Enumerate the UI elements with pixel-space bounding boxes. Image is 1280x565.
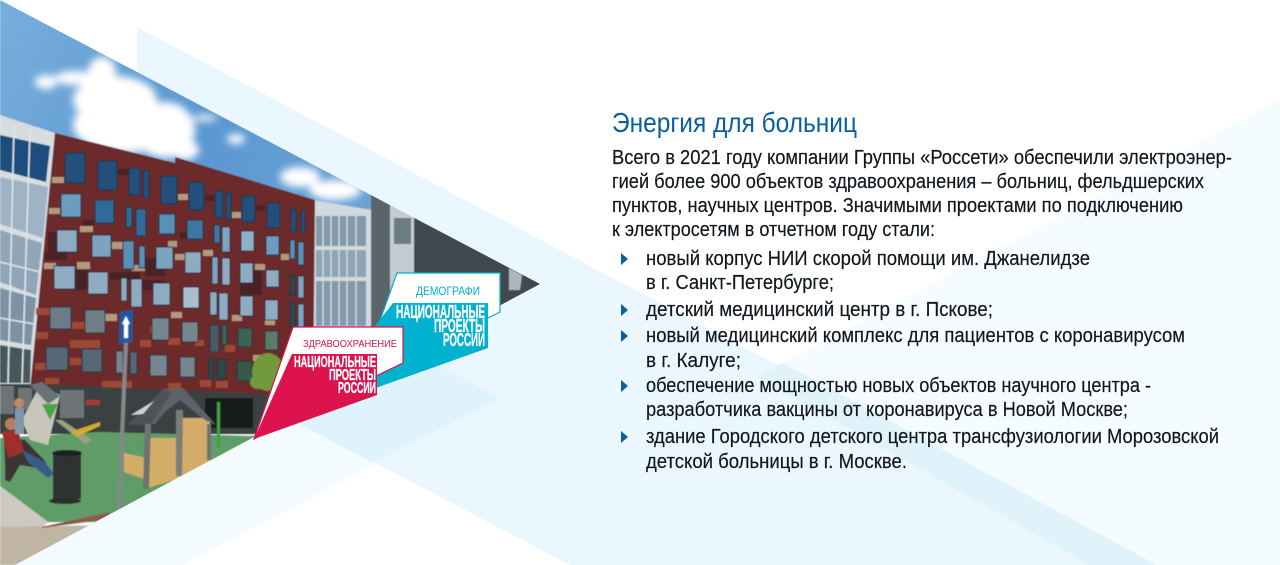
bullet: vaccine developer: разработчика вакцины от коронавируса в Новой Москве;: [646, 398, 1128, 421]
slide and climbing frame: [22, 382, 100, 445]
brick facade: [30, 133, 315, 400]
heading: Энергия для больниц: [612, 107, 857, 138]
logo wordmark: national projects russia: РОССИИ: [338, 380, 376, 397]
sky with clouds: [0, 0, 420, 240]
logo wordmark: national projects russia: РОССИИ: [443, 330, 485, 350]
logo wordmark: national projects russia: [396, 302, 485, 350]
logo wordmark: national projects russia: [294, 354, 376, 397]
label: healthcare: ЗДРАВООХРАНЕНИЕ: [303, 338, 397, 350]
tree: [250, 353, 284, 391]
bullet: transfusiology centre: детской больницы в г. Москве.: [646, 450, 907, 473]
building windows: [46, 153, 305, 381]
logo: healthcare national project: [254, 327, 403, 439]
intro paragraph: [612, 146, 1232, 241]
green playground ground: [0, 431, 255, 523]
left glass building: [0, 115, 55, 390]
logo wordmark: national projects russia: ПРОЕКТЫ: [434, 316, 485, 336]
bullet: research institute: новый корпус НИИ скорой помощи им. Джанелидзе: [646, 247, 1090, 270]
intro paragraph: пунктов, научных центров. Значимыми проектами по подключению: [612, 194, 1183, 217]
bullet list of projects: [621, 247, 1219, 473]
label: demography: ДЕМОГРАФИ: [416, 286, 480, 298]
logo wordmark: national projects russia: НАЦИОНАЛЬНЫЕ: [396, 302, 485, 322]
bullet: vaccine developer: [621, 374, 1151, 421]
right glass building: [313, 200, 372, 400]
logo wordmark: national projects russia: ПРОЕКТЫ: [329, 367, 376, 384]
bullet: transfusiology centre: [621, 425, 1219, 473]
logo: demography national project: [370, 273, 500, 390]
bullet: children's medical centre: детский медицинский центр в г. Пскове;: [646, 298, 993, 321]
bullet: vaccine developer: обеспечение мощностью новых объектов научного центра -: [646, 374, 1151, 397]
play house: [124, 388, 220, 489]
intro paragraph: к электросетям в отчетном году стали:: [612, 218, 935, 241]
intro paragraph: гией более 900 объектов здравоохранения – больниц, фельдшерских: [612, 170, 1205, 193]
shopfront ground floor: [0, 383, 269, 435]
bullet: transfusiology centre: здание Городского детского центра трансфузиологии Морозовской: [646, 425, 1219, 448]
road sign with pole: [117, 310, 133, 508]
bullet: coronavirus complex: в г. Калуге;: [646, 349, 741, 372]
dark striped building: [370, 195, 540, 326]
waste bin: [49, 450, 82, 504]
people on bench: [2, 398, 54, 482]
bullet: research institute: в г. Санкт-Петербурге;: [646, 271, 834, 294]
logo wordmark: national projects russia: НАЦИОНАЛЬНЫЕ: [294, 354, 376, 371]
bullet: coronavirus complex: [621, 324, 1185, 372]
bullet: research institute: [621, 247, 1090, 294]
bullet: coronavirus complex: новый медицинский комплекс для пациентов с коронавирусом: [646, 324, 1185, 347]
photo: hospital building and playground: [0, 0, 545, 565]
